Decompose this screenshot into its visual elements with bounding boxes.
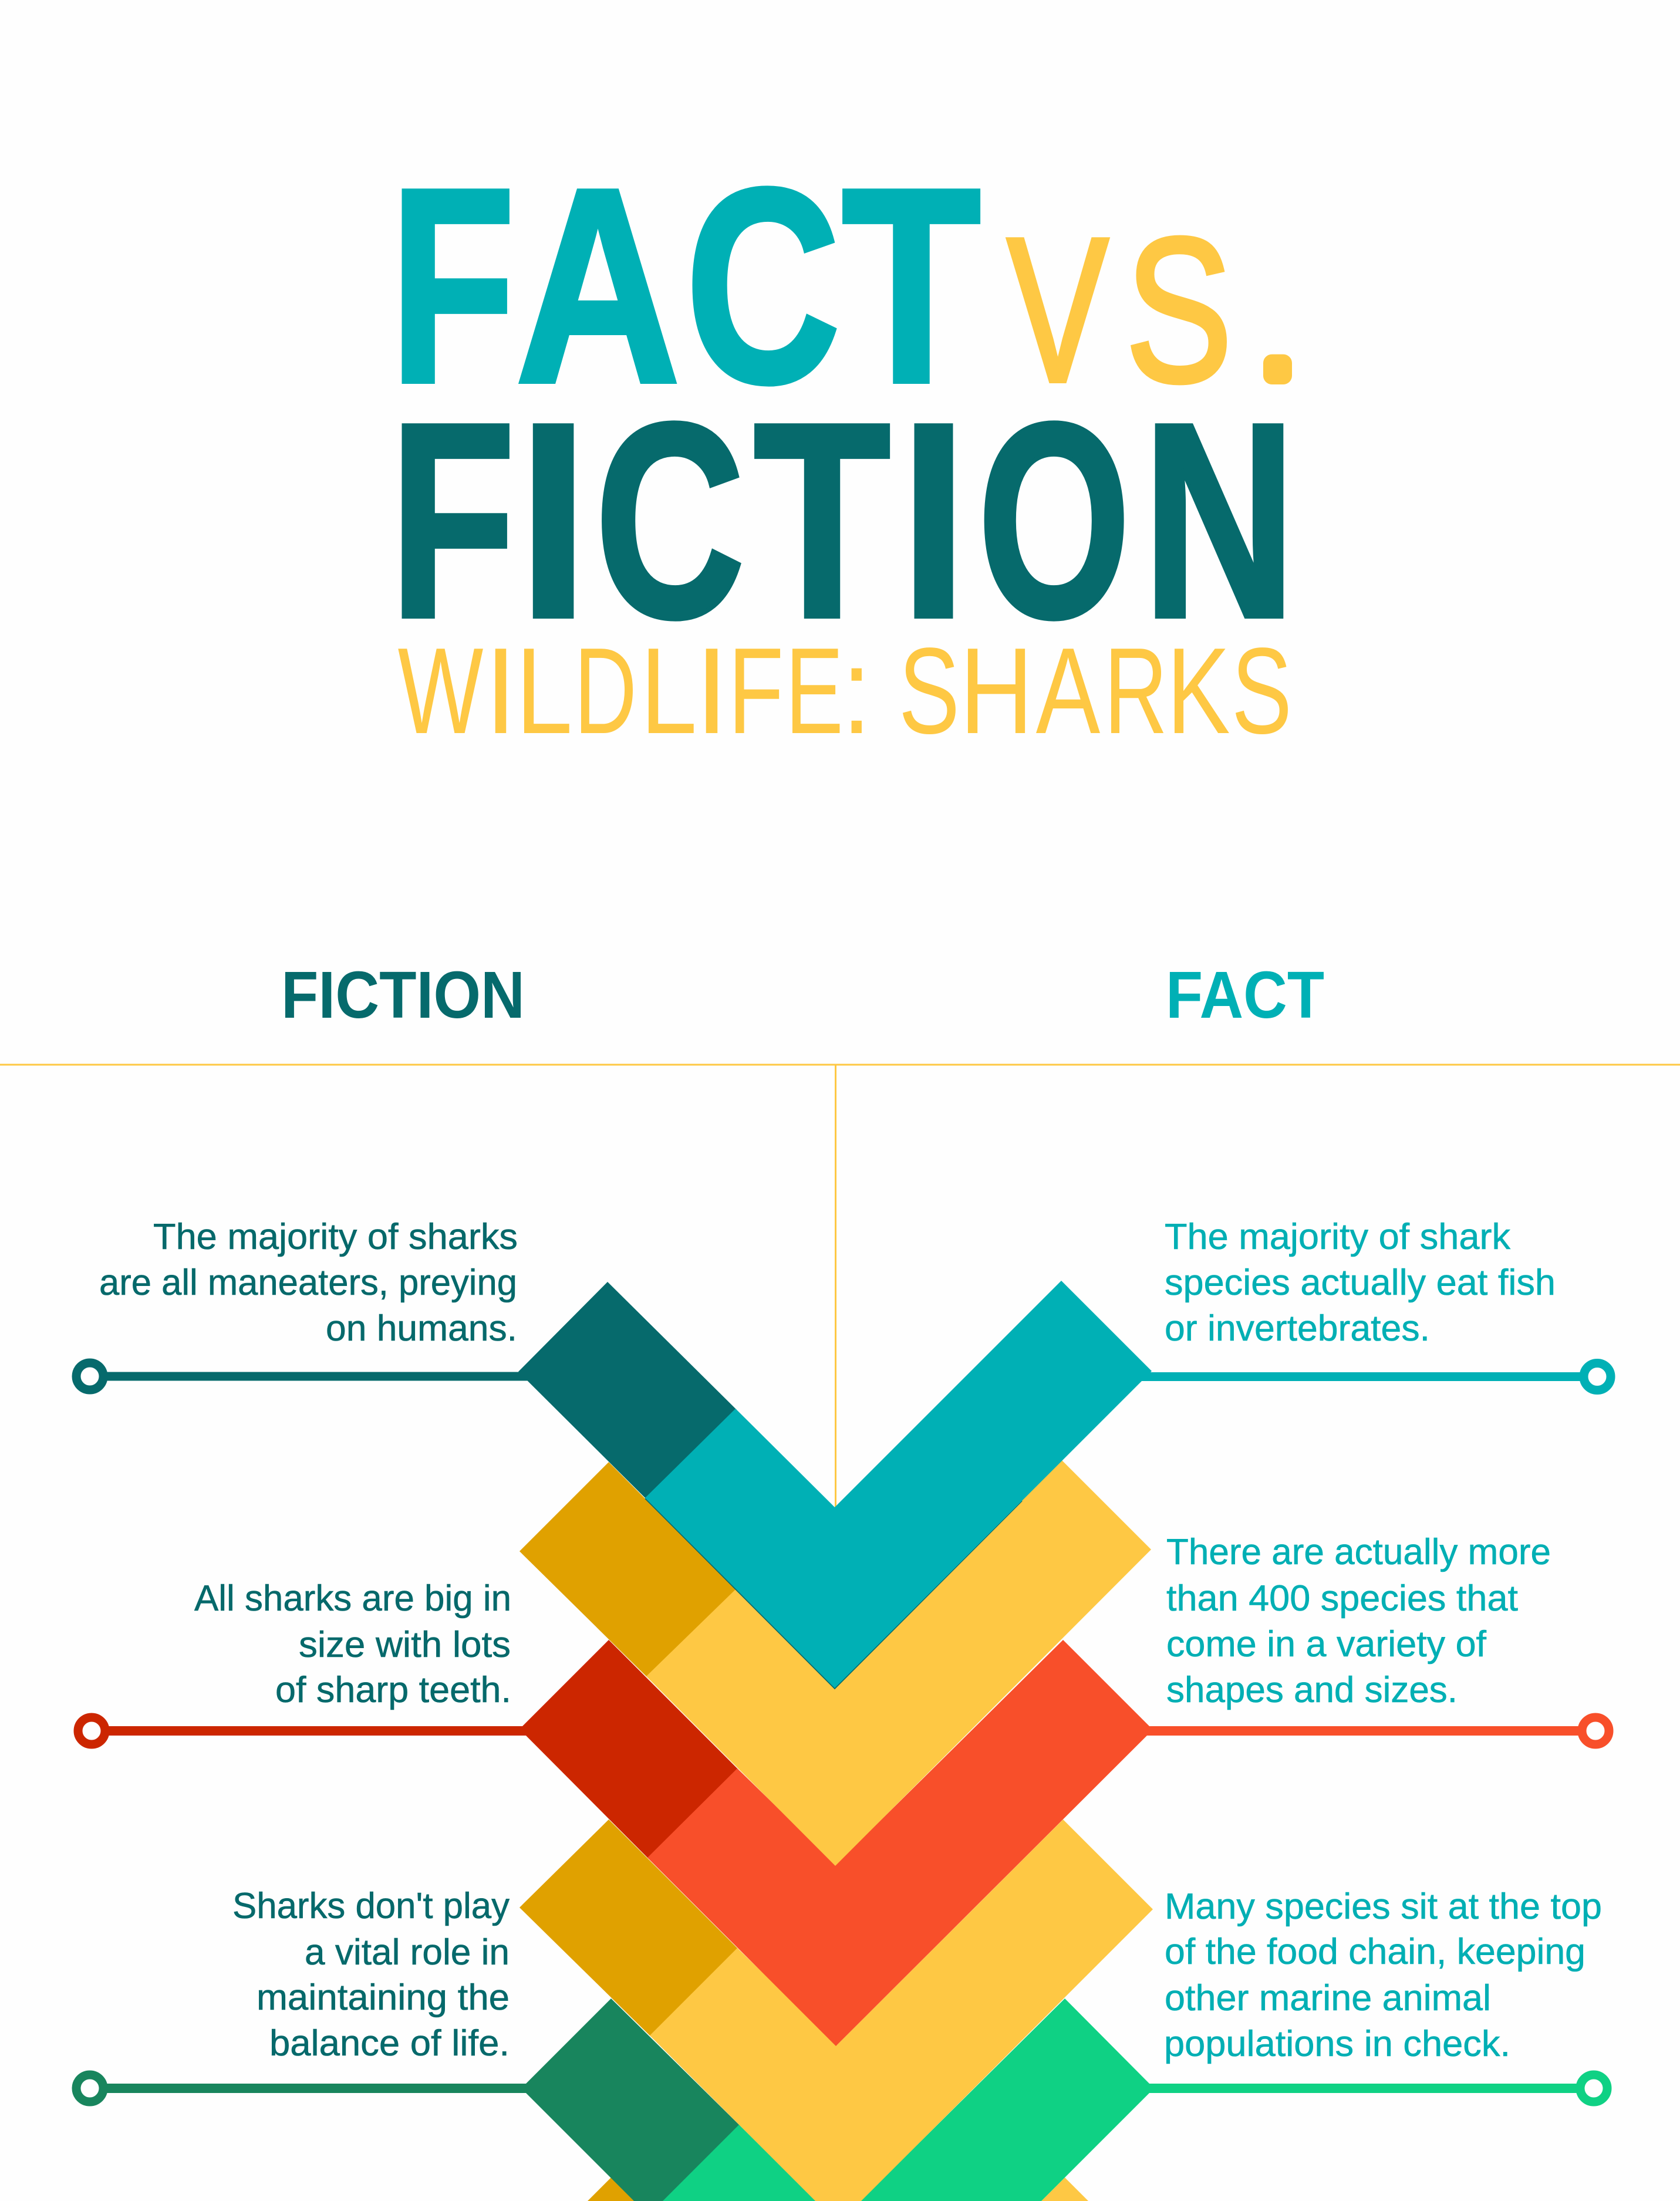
fiction text 3: Sharks don't play xyxy=(232,1886,510,1926)
fiction connector 3 xyxy=(76,2075,534,2102)
fact connector 2 xyxy=(1145,1717,1609,1744)
fact text 1: species actually eat fish xyxy=(1165,1262,1556,1303)
fiction text 2 xyxy=(194,1578,511,1710)
title word: FICTION: C xyxy=(595,366,745,676)
title word: FACT: F xyxy=(390,131,515,441)
chevron 5: green xyxy=(521,1999,1154,2201)
subtitle: I xyxy=(485,623,517,759)
fiction text 2: All sharks are big in xyxy=(194,1578,511,1619)
fact connector 3 xyxy=(1145,2075,1607,2102)
subtitle: D xyxy=(574,623,637,759)
column heading: FICTION: FICTION xyxy=(281,958,525,1032)
subtitle: A xyxy=(1036,623,1100,759)
subtitle: H xyxy=(960,623,1033,759)
fiction text 2: size with lots xyxy=(299,1625,511,1665)
chevron stack xyxy=(518,1281,1154,2201)
chevron 4: yellow xyxy=(519,1819,1153,2201)
fact text 2: There are actually more xyxy=(1166,1532,1551,1572)
chevron 1: teal xyxy=(518,1281,1152,1689)
column heading: FACT: FACT xyxy=(1166,958,1324,1032)
title word: FACT: C xyxy=(686,131,841,441)
fiction connector 1 xyxy=(76,1363,529,1390)
chevron 3: orange xyxy=(519,1640,1153,2046)
title word: FICTION: T xyxy=(754,366,890,676)
fact text 1 xyxy=(1165,1217,1556,1349)
title xyxy=(390,131,1296,759)
fact text 2 xyxy=(1166,1532,1551,1710)
fact text 3: other marine animal xyxy=(1165,1978,1491,2018)
title word: VS.: V xyxy=(1007,195,1109,425)
fact text 3 xyxy=(1164,1886,1602,2064)
fiction text 3: a vital role in xyxy=(305,1932,510,1973)
fact text 2: come in a variety of xyxy=(1166,1624,1487,1665)
subtitle: R xyxy=(1104,623,1168,759)
title word: FICTION: O xyxy=(978,366,1131,676)
chevron 6: yellow, cut off at page bottom xyxy=(588,2178,1088,2201)
subtitle: I xyxy=(695,623,729,759)
fiction text 1: on humans. xyxy=(326,1308,517,1349)
title word: FICTION: N xyxy=(1143,366,1296,676)
subtitle: W xyxy=(398,623,483,759)
fact text 2: shapes and sizes. xyxy=(1166,1670,1458,1710)
subtitle: : xyxy=(842,623,871,759)
title word: FICTION: F xyxy=(390,366,515,676)
fiction text 2: of sharp teeth. xyxy=(275,1670,511,1710)
chevron 2: yellow xyxy=(519,1460,1151,1866)
subtitle: E xyxy=(785,623,844,759)
fiction text 3 xyxy=(232,1886,510,2064)
horizontal divider and centre divider xyxy=(0,1064,1680,1511)
title word: FACT: A xyxy=(515,131,680,441)
fiction text 3: maintaining the xyxy=(257,1977,510,2018)
subtitle: K xyxy=(1167,623,1230,759)
fact text 3: of the food chain, keeping xyxy=(1165,1932,1585,1972)
fiction text 1: are all maneaters, preying xyxy=(99,1262,517,1303)
fact text 2: than 400 species that xyxy=(1166,1578,1518,1619)
fact text 1: or invertebrates. xyxy=(1165,1308,1430,1349)
fiction text 3: balance of life. xyxy=(269,2023,510,2064)
fact connector 1 xyxy=(1142,1363,1611,1390)
fiction text 1: The majority of sharks xyxy=(153,1217,518,1257)
subtitle: S xyxy=(1232,623,1292,759)
fiction connector 2 xyxy=(78,1717,531,1744)
subtitle: S xyxy=(899,623,960,759)
title word: FACT: T xyxy=(842,131,981,441)
subtitle: F xyxy=(728,623,784,759)
title word: VS.: . xyxy=(1261,270,1294,401)
title word: VS.: S xyxy=(1125,195,1232,425)
subtitle: L xyxy=(516,623,573,759)
fiction text 1 xyxy=(99,1217,518,1349)
fact text 3: populations in check. xyxy=(1164,2024,1510,2064)
title word: FICTION: I xyxy=(900,366,967,676)
fact text 3: Many species sit at the top xyxy=(1165,1886,1602,1927)
fact text 1: The majority of shark xyxy=(1165,1217,1511,1257)
subtitle: L xyxy=(640,623,697,759)
title word: FICTION: I xyxy=(518,366,589,676)
